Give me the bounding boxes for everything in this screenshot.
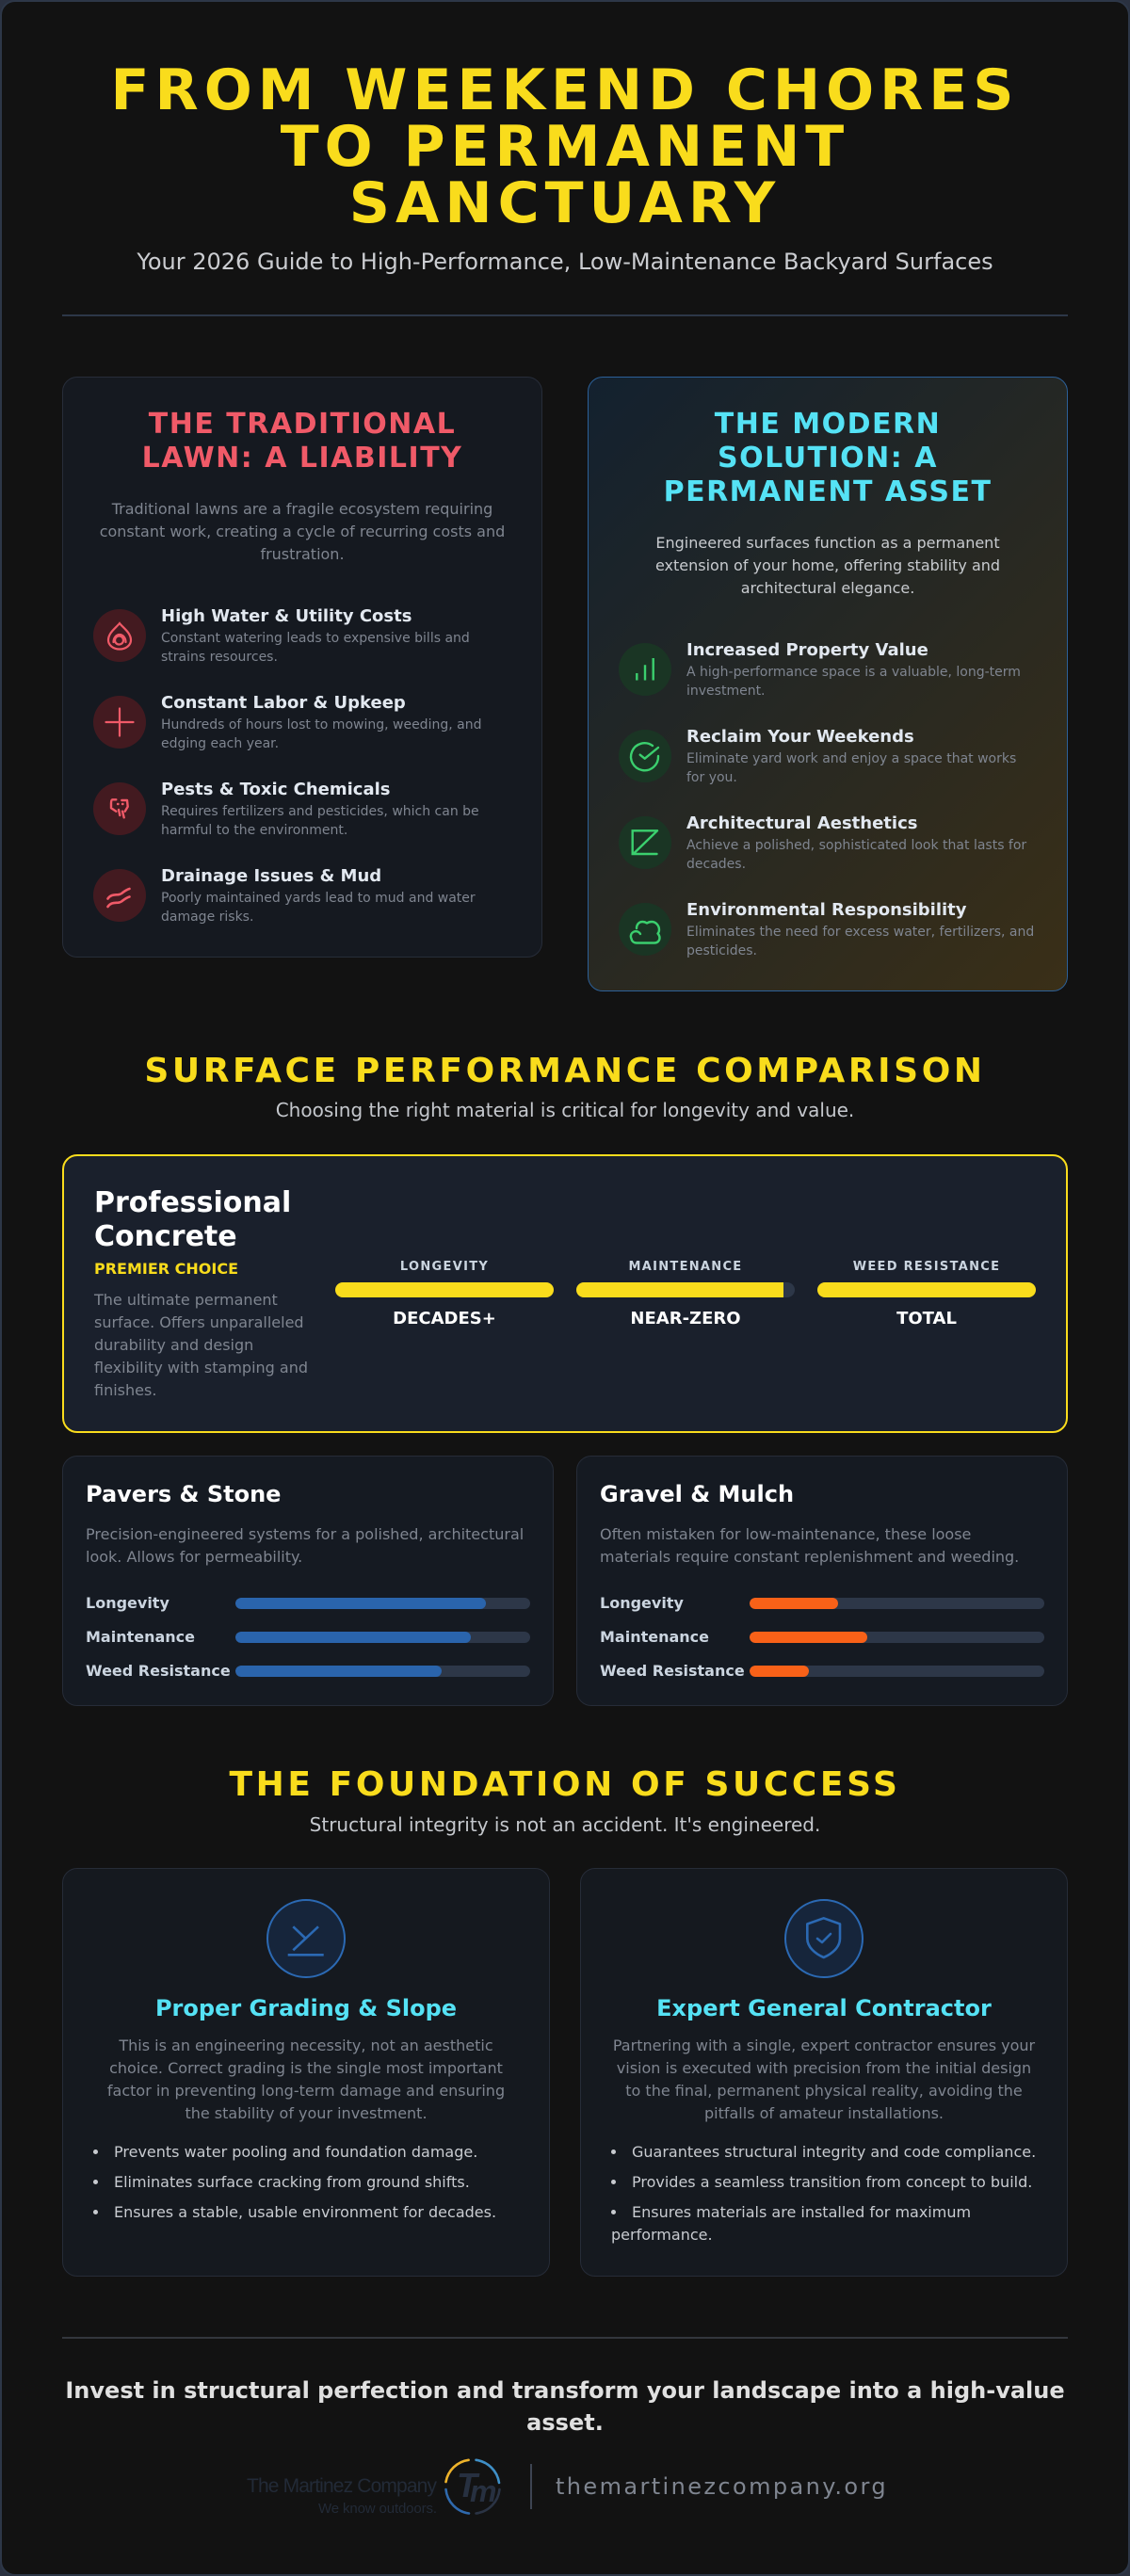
item text: Eliminates the need for excess water, fertilizers, and [686,925,1034,940]
stat: weed resistance [817,1260,1036,1328]
item title: Architectural Aesthetics [686,813,917,833]
item: property value [619,640,1021,699]
grading text: factor in preventing long-term damage and ensuring [107,2082,505,2100]
item text: investment. [686,684,766,699]
item: reclaim weekends [619,727,1016,785]
grading text: choice. Correct grading is the single most important [109,2059,503,2077]
icon: bars [619,643,671,696]
item: architectural aesthetics [619,813,1026,872]
title: SANCTUARY [349,170,781,236]
item text [161,804,479,838]
bar: pavers weed resistance: Weed Resistance [86,1662,231,1680]
icon: slope [266,1899,346,1978]
contractor text: vision is executed with precision from the initial design [617,2059,1031,2077]
grading text: the stability of your investment. [185,2104,428,2122]
pavers title: Pavers & Stone [86,1481,281,1507]
item title: Environmental Responsibility [686,900,967,920]
bar: gravel maintenance: Maintenance [600,1628,709,1646]
item text: strains resources. [161,650,278,665]
concrete description [94,1186,308,1399]
title: FROM WEEKEND CHORES [111,57,1019,123]
heading: modern solution: SOLUTION: A [718,442,938,475]
item text: A high-performance space is a valuable, long-term [686,665,1021,680]
logo wordmark: The Martinez Company [247,2475,437,2497]
gravel text: Often mistaken for low-maintenance, these loose [600,1525,971,1543]
item text: Hundreds of hours lost to mowing, weeding, and [161,717,481,733]
item text [686,751,1016,785]
item title: Reclaim Your Weekends [686,727,914,747]
icon: angle square [619,816,671,869]
text block: traditional lawn intro [100,500,505,563]
concrete title: Professional [94,1186,291,1219]
icon: shield [784,1899,864,1978]
item text: pesticides. [686,943,757,958]
item text: decades. [686,857,746,872]
concrete text: durability and design [94,1336,253,1354]
concrete text: surface. Offers unparalleled [94,1313,304,1331]
icon: pest [93,782,146,835]
item text [161,891,476,925]
grading text [107,2037,505,2122]
panel: gravel and mulch [576,1456,1068,1706]
text block: modern solution intro: architectural elegance. [741,579,914,597]
heading: modern solution: PERMANENT ASSET [664,475,992,508]
contractor text: to the final, permanent physical reality, avoiding the [625,2082,1023,2100]
bar: gravel weed resistance [600,1662,1044,1680]
footer logo [235,2448,518,2527]
item: environmental responsibility [619,900,1034,958]
panel: expert contractor [580,1868,1068,2277]
stat: maintenance [576,1260,795,1328]
contractor bullet list: Guarantees structural integrity and code compliance. [632,2143,1036,2161]
item title: Increased Property Value [686,640,928,660]
contractor bullet list: Ensures materials are installed for maximum performance. [611,2203,971,2244]
item text: harmful to the environment. [161,823,347,838]
text block: modern solution intro: Engineered surfaces function as a permanent [655,534,1000,552]
grading text: This is an engineering necessity, not an aesthetic [119,2037,493,2054]
bar: pavers maintenance: Maintenance [86,1628,195,1646]
gravel text: materials require constant replenishment and weeding. [600,1548,1019,1566]
gravel title: Gravel & Mulch [600,1481,794,1507]
grading bullet list: Ensures a stable, usable environment for decades. [114,2203,496,2221]
item text: Requires fertilizers and pesticides, which can be [161,804,479,819]
bar: gravel longevity [600,1594,1044,1612]
item text: Eliminate yard work and enjoy a space that works [686,751,1016,766]
bar: gravel weed resistance: Weed Resistance [600,1662,745,1680]
item: pests [93,780,479,838]
item text [161,717,481,751]
bar: gravel maintenance [600,1628,1044,1646]
panel: pavers and stone [62,1456,554,1706]
bar: pavers longevity: Longevity [86,1594,170,1612]
bar: pavers weed resistance [86,1662,530,1680]
contractor bullet list: Provides a seamless transition from concept to build. [632,2173,1032,2191]
item: high water costs [93,606,470,665]
contractor text: Partnering with a single, expert contractor ensures your [613,2037,1035,2054]
heading: traditional lawn: LAWN: A LIABILITY [142,442,462,475]
item title: High Water & Utility Costs [161,606,412,626]
premier choice label: PREMIER CHOICE [94,1260,238,1278]
item text: Poorly maintained yards lead to mud and water [161,891,476,906]
item text [686,925,1034,958]
grading title: Proper Grading & Slope [155,1995,457,2021]
subheading: surface performance: Choosing the right material is critical for longevity and value. [276,1099,854,1121]
item text [686,665,1021,699]
concrete text: finishes. [94,1381,156,1399]
text block: traditional lawn intro: Traditional lawns are a fragile ecosystem requiring [112,500,492,518]
stat: weed resistance: WEED RESISTANCE [853,1260,1000,1274]
icon: plus [93,696,146,749]
item text: edging each year. [161,736,279,751]
icon: waves [93,869,146,922]
text block: traditional lawn intro: frustration. [260,545,345,563]
stat: longevity: LONGEVITY [400,1260,489,1274]
grading bullet list [93,2143,496,2221]
item: constant labor [93,693,481,751]
item title: Drainage Issues & Mud [161,866,381,886]
call to action: Invest in structural perfection and transform your landscape into a high-value [65,2377,1065,2404]
stat: maintenance: NEAR-ZERO [630,1309,741,1328]
logo monogram: m [470,2474,496,2508]
heading: surface performance comparison: SURFACE PERFORMANCE COMPARISON [144,1052,986,1090]
contractor title: Expert General Contractor [656,1995,992,2021]
icon: cloud [619,903,671,956]
panel: proper grading [62,1868,550,2277]
concrete title [94,1186,291,1253]
contractor text: pitfalls of amateur installations. [704,2104,944,2122]
contractor bullet list [611,2141,1037,2254]
logo ring arcs [446,2460,499,2514]
grading bullet list: Prevents water pooling and foundation damage. [114,2143,477,2161]
text block: traditional lawn intro: constant work, creating a cycle of recurring costs and [100,523,505,540]
concrete text: flexibility with stamping and [94,1359,308,1377]
item text [161,631,470,665]
call to action: asset. [526,2409,604,2436]
grading bullet list: Eliminates surface cracking from ground shifts. [114,2173,470,2191]
stat: weed resistance: TOTAL [896,1309,957,1328]
heading: modern solution: THE MODERN [715,408,941,441]
item text: Achieve a polished, sophisticated look that lasts for [686,838,1026,853]
panel: modern solution [588,377,1068,991]
icon: check circle [619,730,671,782]
subtitle: Your 2026 Guide to High-Performance, Low-Maintenance Backyard Surfaces [137,249,993,275]
pavers text [86,1525,524,1566]
item text [686,838,1026,872]
pavers text: look. Allows for permeability. [86,1548,302,1566]
panel: traditional lawn [62,377,542,958]
bar: gravel longevity: Longevity [600,1594,684,1612]
text block: modern solution intro: extension of your home, offering stability and [655,556,1000,574]
item: drainage [93,866,476,925]
heading: foundation of success: THE FOUNDATION OF SUCCESS [229,1765,901,1804]
bar: pavers maintenance [86,1628,530,1646]
item title: Constant Labor & Upkeep [161,693,406,713]
concrete text [94,1291,308,1399]
item text: damage risks. [161,910,253,925]
panel: professional concrete [62,1154,1068,1433]
stat: maintenance: MAINTENANCE [628,1260,742,1274]
footer website: themartinezcompany.org [556,2473,888,2500]
item text: Constant watering leads to expensive bills and [161,631,470,646]
stat: longevity [335,1260,554,1328]
concrete title: Concrete [94,1220,237,1253]
stat: longevity: DECADES+ [393,1309,496,1328]
concrete text: The ultimate permanent [94,1291,278,1309]
heading: modern solution [664,408,992,508]
subheading: foundation: Structural integrity is not an accident. It's engineered. [310,1813,820,1836]
bar: pavers longevity [86,1594,530,1612]
item title: Pests & Toxic Chemicals [161,780,390,799]
heading: traditional lawn: THE TRADITIONAL [149,408,456,441]
call to action [62,2375,1068,2439]
item text: for you. [686,770,737,785]
pavers text: Precision-engineered systems for a polished, architectural [86,1525,524,1543]
contractor text [613,2037,1036,2122]
logo tagline: We know outdoors. [318,2501,437,2517]
title [111,57,1019,236]
text block: modern solution intro [655,534,1000,597]
icon: water drop [93,609,146,662]
gravel text [600,1525,1019,1566]
title: TO PERMANENT [281,114,849,180]
logo monogram: T [457,2466,477,2504]
heading: traditional lawn [142,408,462,475]
